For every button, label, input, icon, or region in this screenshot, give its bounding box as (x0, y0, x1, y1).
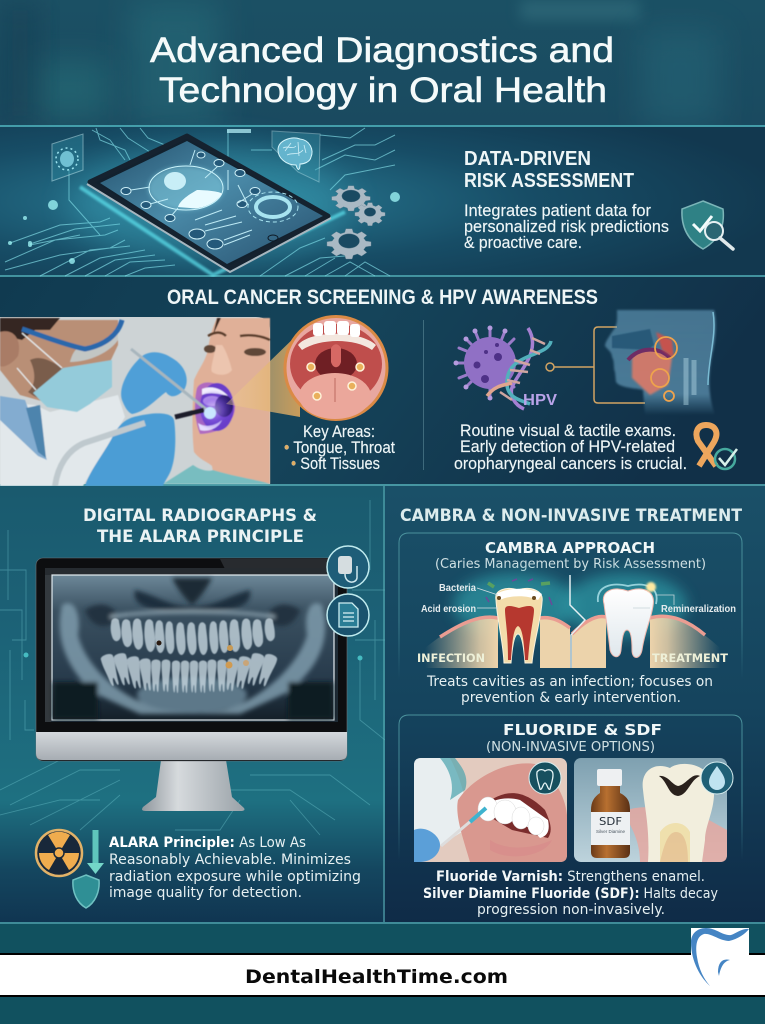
footer band (0, 922, 765, 1024)
tooth: infected (496, 588, 542, 663)
text: key areas: Key Areas: (303, 422, 375, 441)
highlight cone (226, 332, 300, 417)
text: key areas: • Soft Tissues (291, 454, 380, 473)
text: ALARA principle: image quality for detection. (109, 885, 302, 901)
icon: sensor (327, 546, 369, 588)
text: ALARA principle: ALARA Principle: As Low As (109, 835, 306, 851)
body text: & proactive care. (464, 234, 582, 252)
body text: routine exams (454, 421, 687, 473)
panel: data-driven risk assessment (0, 125, 765, 277)
icon: brain hologram (227, 129, 320, 182)
icon: HPV virus and DNA (454, 326, 551, 409)
bottle small print: Silver Diamine (596, 829, 625, 834)
heading: ORAL CANCER SCREENING & HPV AWARENESS (167, 286, 598, 309)
body text: routine exams: Routine visual & tactile exams. (460, 421, 676, 440)
icon: awareness ribbon and check (696, 425, 737, 469)
card heading: CAMBRA APPROACH (485, 539, 655, 557)
photo: dentist examining patient with UV light (0, 317, 300, 486)
stand (142, 760, 244, 811)
label: infection: INFECTION (417, 651, 485, 665)
heading: CAMBRA & NON-INVASIVE TREATMENT (400, 506, 743, 525)
text: ALARA principle: radiation exposure while optimizing (109, 869, 361, 885)
label: HPV: HPV (523, 392, 557, 409)
icon: head and throat profile (605, 310, 716, 415)
photo: SDF bottle and treated tooth (574, 758, 733, 862)
tooth: remineralized (603, 589, 653, 658)
heading: risk assessment: RISK ASSESSMENT (464, 170, 634, 192)
dentist face (0, 320, 118, 402)
label: bacteria: Bacteria (439, 583, 476, 594)
gloved hands (121, 352, 187, 414)
heading line 1: DIGITAL RADIOGRAPHS & (83, 506, 317, 525)
panel: oral cancer screening and HPV awareness (0, 277, 765, 486)
heading line 2: THE ALARA PRINCIPLE (97, 527, 304, 546)
icon: drop badge (701, 762, 733, 794)
header band (0, 0, 765, 126)
card body text (423, 869, 718, 918)
arrow: dose down (87, 830, 104, 874)
text: ALARA principle (109, 835, 361, 901)
text: key areas: • Tongue, Throat (284, 438, 395, 457)
card body text: Fluoride Varnish: Strengthens enamel. (436, 869, 705, 885)
logo: tooth (691, 928, 749, 986)
card heading: FLUORIDE & SDF (503, 721, 662, 739)
icon: shield with magnifier (682, 201, 733, 249)
icon: open mouth close-up (285, 316, 387, 420)
dentist coat (0, 395, 125, 486)
illustration: infection vs treatment teeth (425, 573, 720, 668)
icon: tablet with patient data (80, 136, 345, 275)
website name: DentalHealthTime.com (245, 966, 508, 988)
circuit traces (0, 500, 385, 835)
card: CAMBRA approach (399, 533, 742, 706)
body text: personalized risk predictions (464, 218, 669, 236)
body text (464, 202, 669, 252)
body text: Integrates patient data for (464, 202, 651, 220)
dental mirror (131, 349, 212, 414)
title: Advanced Diagnostics and (150, 31, 614, 70)
patient gown (163, 465, 270, 484)
connector line (546, 327, 645, 403)
UV handpiece (55, 423, 145, 486)
title line 2: Technology in Oral Health (159, 71, 607, 110)
circuit traces (5, 128, 395, 276)
icon: radiation symbol (36, 830, 82, 876)
icon: document (327, 594, 369, 636)
photo: fluoride varnish application (414, 758, 567, 862)
icon: gears (327, 186, 385, 259)
patient neck and face (192, 318, 270, 484)
icon: shield (73, 875, 99, 908)
text: key areas (284, 422, 395, 473)
label: remineralization: Remineralization (661, 604, 736, 615)
label: treatment: TREATMENT (652, 651, 728, 665)
text: ALARA principle: Reasonably Achievable. Minimizes (109, 852, 351, 868)
panel: CAMBRA and non-invasive treatment (383, 486, 765, 923)
icon: tooth badge (529, 762, 561, 794)
body text: routine exams: Early detection of HPV-related (460, 437, 675, 456)
label: acid erosion: Acid erosion (421, 604, 476, 615)
panel: digital radiographs (0, 486, 385, 923)
x-ray image (52, 575, 334, 720)
card subheading: (NON-INVASIVE OPTIONS) (486, 739, 655, 755)
card body text (426, 674, 713, 706)
card body text: Silver Diamine Fluoride (SDF): Halts decay (423, 886, 718, 902)
icon: AI hologram card (52, 134, 83, 181)
card body text: prevention & early intervention. (461, 690, 681, 706)
card subheading: (Caries Management by Risk Assessment) (435, 556, 706, 572)
heading: data-driven: DATA-DRIVEN (464, 148, 591, 170)
monitor with panoramic x-ray (36, 558, 347, 811)
card body text: Treats cavities as an infection; focuses on (426, 674, 713, 690)
body text: routine exams: oropharyngeal cancers is crucial. (454, 454, 687, 473)
card body text: progression non-invasively. (477, 902, 665, 918)
card: fluoride and SDF (399, 715, 742, 918)
bottle label: SDF (599, 816, 622, 828)
